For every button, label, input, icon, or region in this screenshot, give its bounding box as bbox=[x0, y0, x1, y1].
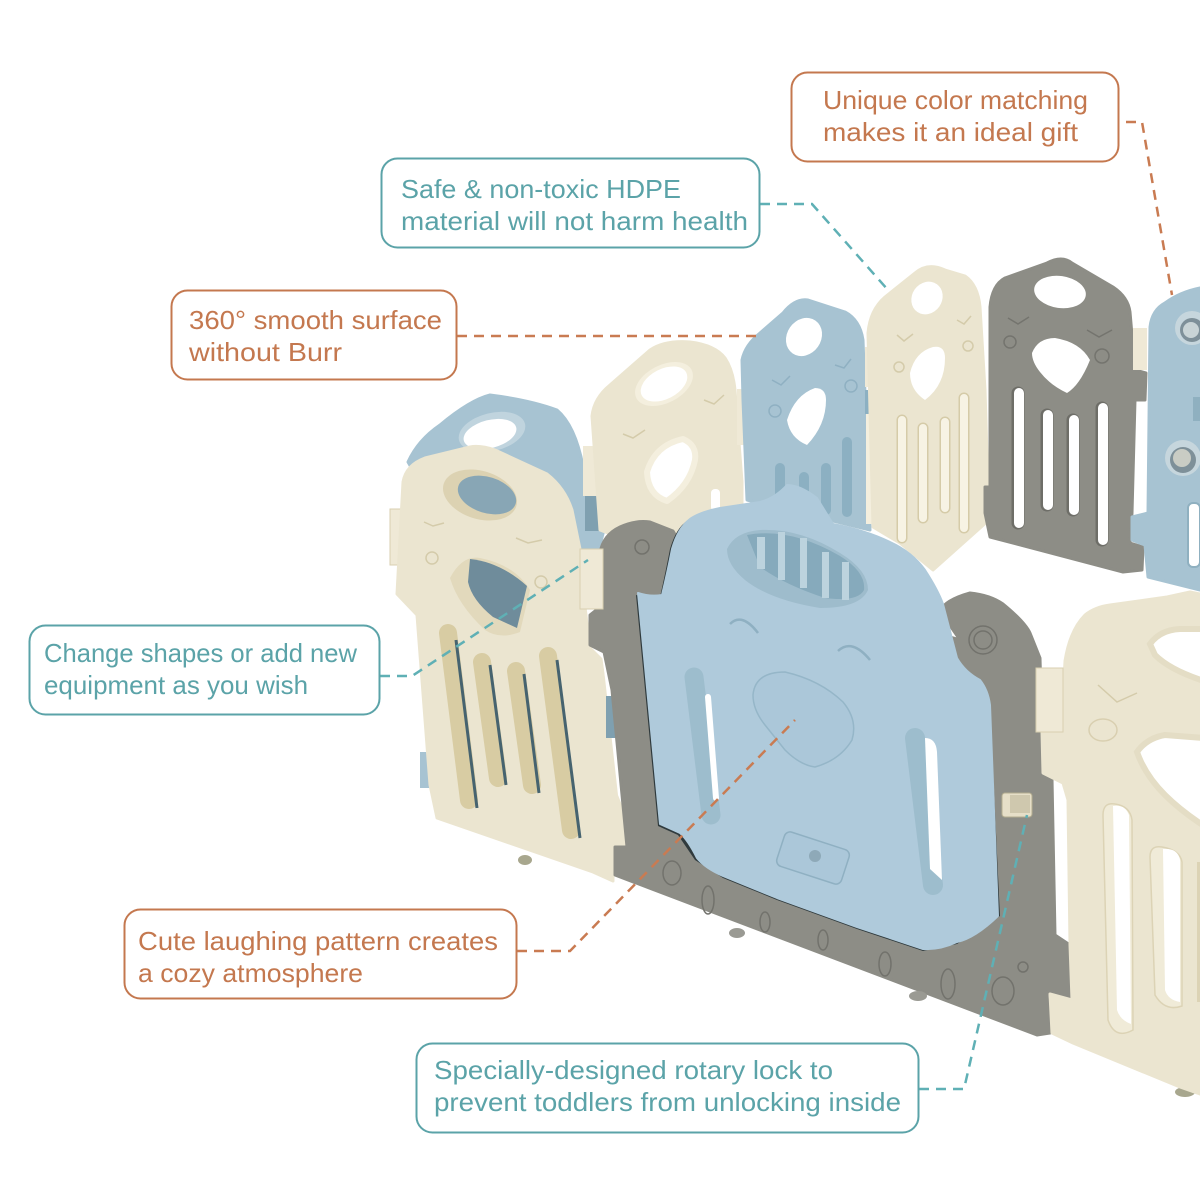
door handle bbox=[727, 530, 868, 608]
far panel: blue 3 bbox=[742, 300, 877, 530]
frame screws and ovals bbox=[635, 540, 1028, 1005]
front gate door: blue bbox=[636, 485, 1000, 951]
callout: rotary lock: prevent toddlers from unlocking inside bbox=[434, 1087, 901, 1117]
callout: safe material: Safe & non-toxic HDPE bbox=[401, 174, 681, 204]
callout: change shapes bbox=[30, 626, 380, 714]
left panel slots bbox=[448, 633, 580, 838]
callout: unique color matching bbox=[792, 72, 1118, 162]
callout: rotary lock bbox=[416, 1044, 918, 1132]
callout: cute pattern: Cute laughing pattern creates bbox=[138, 926, 498, 956]
ball window upper bbox=[1175, 311, 1200, 345]
door eyebrows bbox=[730, 620, 870, 660]
frame feet bbox=[729, 928, 745, 938]
door slots bbox=[694, 677, 942, 885]
front panel: cream right bbox=[1042, 592, 1200, 1097]
callout: rotary lock: Specially-designed rotary lock to bbox=[434, 1055, 833, 1085]
front panel: cream left bbox=[390, 446, 627, 881]
callout: smooth surface: 360° smooth surface bbox=[189, 305, 442, 335]
callout: change shapes: equipment as you wish bbox=[44, 670, 308, 700]
front gate frame: grey bbox=[590, 522, 1070, 1035]
ball window lower bbox=[1165, 440, 1200, 476]
hinge cream on gate left bbox=[580, 549, 603, 609]
callout: cute pattern: a cozy atmosphere bbox=[138, 958, 363, 988]
connector lines bbox=[380, 122, 1172, 1089]
far panel: cream 2 bbox=[592, 342, 753, 545]
far panel: cream 4 bbox=[868, 267, 989, 570]
rotary lock bbox=[1002, 793, 1032, 817]
callout: unique color matching: makes it an ideal gift bbox=[823, 117, 1079, 147]
callout: unique color matching: Unique color matching bbox=[823, 85, 1088, 115]
callout: smooth surface bbox=[172, 290, 456, 380]
door logo bbox=[775, 830, 851, 886]
callout: safe material: material will not harm health bbox=[401, 206, 748, 236]
callout: smooth surface: without Burr bbox=[188, 337, 342, 367]
playpen illustration bbox=[390, 259, 1200, 1097]
far panel: grey 5 bbox=[985, 259, 1146, 572]
hinge cream on gate right bbox=[1036, 668, 1063, 732]
door nose bbox=[753, 672, 854, 767]
callout: safe material bbox=[382, 158, 760, 248]
far panel: blue 6 bbox=[1132, 288, 1200, 590]
callout: change shapes: Change shapes or add new bbox=[44, 638, 357, 668]
callout: cute pattern bbox=[124, 910, 516, 998]
far panel: blue behind left bbox=[408, 395, 604, 560]
